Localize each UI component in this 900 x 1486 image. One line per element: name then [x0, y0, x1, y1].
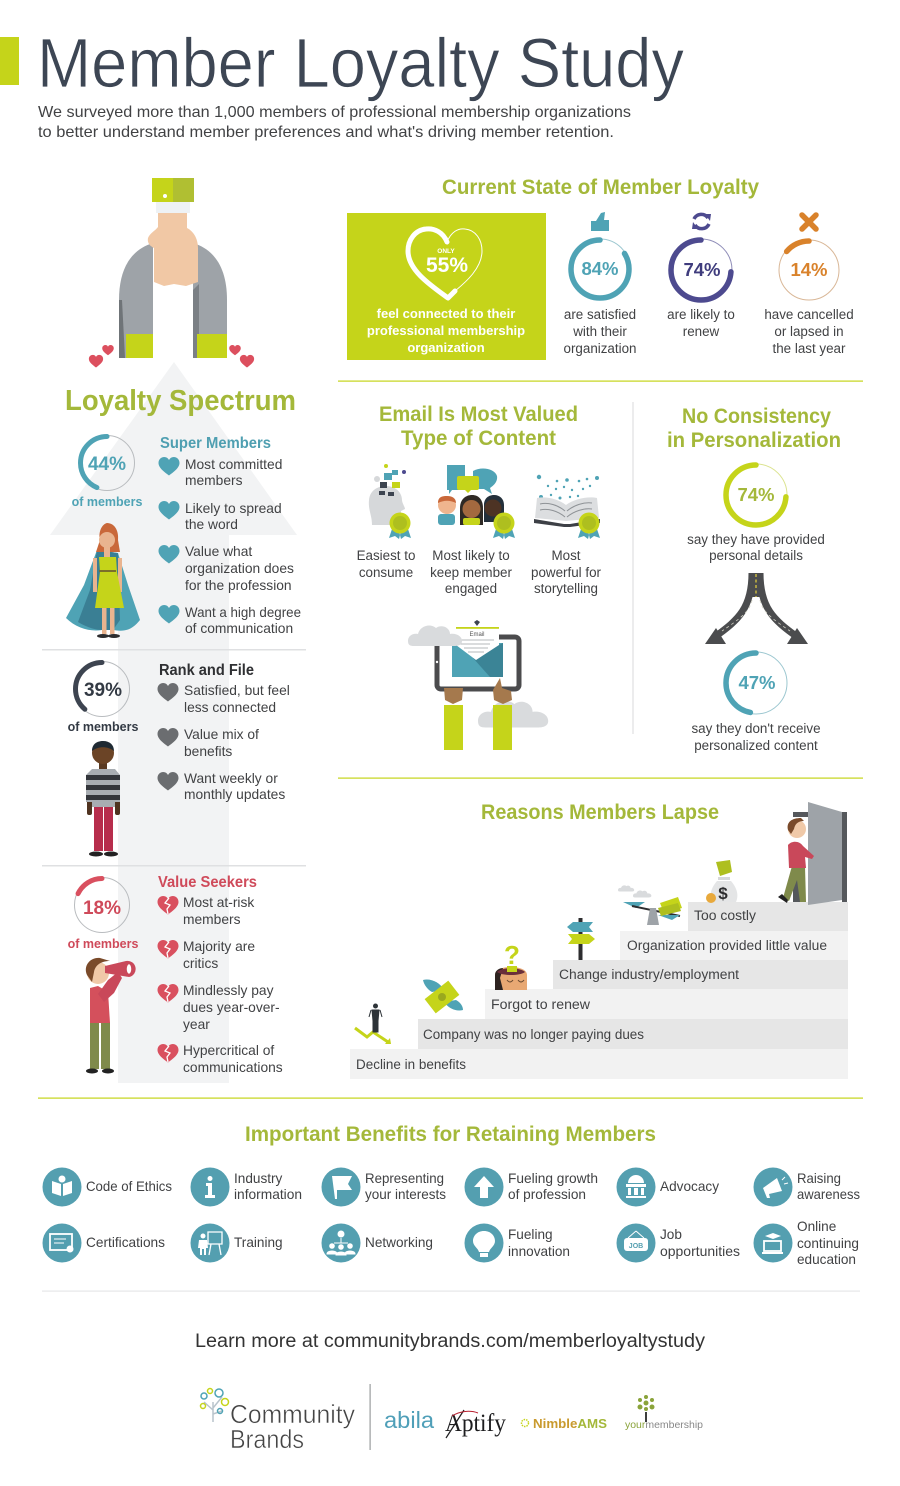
step 2: Company was no longer paying dues: [423, 1027, 644, 1042]
heading: current state: Current State of Member Loyalty: [442, 176, 759, 199]
list with hearts: [158, 683, 290, 802]
caption: [531, 548, 602, 596]
caption: of members: [68, 720, 138, 734]
benefit: industry information: [190, 1168, 302, 1206]
stat: 84% satisfied: 84%: [581, 258, 619, 279]
heading: personalization: No Consistency: [682, 405, 831, 428]
caption: of members: [68, 937, 138, 951]
list with hearts: for the profession: [185, 578, 292, 593]
stat: 47% no personalized content: [691, 652, 821, 753]
list with hearts: the word: [185, 517, 238, 532]
step 3: Forgot to renew: [491, 997, 590, 1012]
heading: Member Loyalty Study: [37, 24, 684, 102]
icon: signpost: [567, 918, 595, 960]
step 3: [485, 989, 848, 1019]
benefit: job opportunities: opportunities: [660, 1244, 740, 1259]
caption: feel connected to their: [377, 306, 515, 321]
icon: thumbs up: [591, 212, 609, 231]
benefit: raising awareness: [754, 1168, 860, 1206]
benefit: training: [190, 1224, 283, 1262]
magnet: [119, 243, 153, 358]
caption: are satisfied: [564, 307, 636, 322]
man: [778, 818, 814, 903]
illustration: man leaving through door: [778, 802, 847, 905]
icon: money bag: [706, 860, 737, 903]
benefit: raising awareness: awareness: [797, 1187, 860, 1202]
benefit: fueling innovation: innovation: [508, 1244, 570, 1259]
ring: [670, 239, 732, 301]
title: [0, 24, 684, 102]
caption: are likely to: [667, 307, 735, 322]
list with broken hearts: Majority are: [183, 939, 255, 954]
benefit: code of ethics: [42, 1168, 172, 1206]
benefit: fueling growth: Fueling growth: [508, 1171, 598, 1186]
stat: 74% provided details: personal details: [709, 548, 803, 563]
hand: [148, 213, 198, 286]
illustration: hand holding magnet: [89, 178, 254, 367]
stat: 84% satisfied: organization: [564, 341, 636, 356]
panel: 55% feel connected: organization: [407, 340, 485, 355]
step 4: [553, 960, 848, 989]
stat: 74% provided details: say they have provided: [687, 532, 825, 547]
caption: Most likely to: [432, 548, 510, 563]
list with hearts: Want weekly or: [184, 771, 278, 786]
list with broken hearts: Hypercritical of: [183, 1043, 274, 1058]
benefit: job opportunities: JOB: [629, 1243, 643, 1250]
heading: email: [379, 403, 578, 450]
stat: 84% satisfied: [564, 212, 636, 356]
icon: money bag: $: [718, 884, 728, 903]
sleeves: [444, 705, 463, 750]
stat: 74% provided details: [687, 464, 825, 563]
illustration: email on tablet: Email: [469, 632, 485, 638]
panel: benefits grid: [42, 1168, 860, 1267]
step 6: [688, 902, 848, 931]
list with hearts: Want a high degree: [185, 605, 301, 620]
subheading: Super Members: [160, 435, 271, 452]
caption: [357, 548, 415, 580]
ring 39%: 39%: [84, 680, 122, 701]
call to action: Learn more at communitybrands.com/memberloyaltystudy: [195, 1331, 706, 1352]
benefit: representing your interests: your interests: [365, 1187, 446, 1202]
list with hearts: Likely to spread: [185, 501, 282, 516]
icon: head with content: [369, 464, 411, 539]
benefit: industry information: Industry: [234, 1171, 283, 1186]
benefit: online continuing education: Online: [797, 1219, 836, 1234]
stat: 74% likely to renew: [667, 214, 735, 339]
ring: [779, 240, 839, 300]
step 5: Organization provided little value: [627, 938, 827, 953]
list with hearts: benefits: [184, 744, 232, 759]
ring 18%: 18%: [83, 898, 121, 919]
heading: important benefits: Important Benefits for Retaining Members: [245, 1123, 656, 1146]
icon: scale with clouds and money: [618, 885, 682, 925]
stat: 74% likely to renew: 74%: [683, 259, 721, 280]
door frame: [842, 812, 847, 902]
ring 18%: [74, 878, 130, 932]
logo: aptify: Aptify: [445, 1410, 506, 1437]
tablet: [437, 637, 519, 689]
benefit: certifications: Certifications: [86, 1235, 165, 1250]
heading: personalization: in Personalization: [667, 429, 841, 452]
list with hearts: of communication: [185, 621, 293, 636]
ring 44%: [80, 436, 134, 490]
step 1: [350, 1049, 848, 1079]
logo: abila: abila: [384, 1407, 434, 1433]
illustration: email on tablet: [408, 620, 548, 750]
list with hearts: Value mix of: [184, 727, 259, 742]
magnet tips: [126, 334, 153, 358]
icon: man on falling graph: [355, 1004, 391, 1044]
icon: man in striped shirt: [86, 741, 120, 856]
question mark: ?: [504, 940, 520, 970]
icon: three people with speech bubbles: [438, 465, 515, 539]
ring 44%: 44%: [88, 454, 126, 475]
intro text: We surveyed more than 1,000 members of professional membership organizations: [38, 104, 631, 121]
panel: 55% feel connected: ONLY: [437, 248, 455, 255]
panel: 55% feel connected: [347, 213, 546, 360]
panel: 55% feel connected: professional membership: [367, 323, 525, 338]
ring 39%: [74, 662, 130, 716]
stat: 47% no personalized content: personalized content: [694, 738, 818, 753]
icon: open book with particles: [534, 475, 600, 539]
stat: 47% no personalized content: 47%: [738, 672, 776, 693]
caption: of members: [72, 495, 142, 509]
list with hearts: Satisfied, but feel: [184, 683, 290, 698]
stat: 84% satisfied: with their: [572, 324, 627, 339]
step 5: [620, 931, 848, 960]
benefit: fueling growth: [464, 1168, 598, 1206]
logo: community brands: [200, 1388, 355, 1454]
benefit: online continuing education: continuing: [797, 1236, 859, 1251]
icon: x mark: [802, 215, 816, 229]
chart: staircase of reasons: [350, 902, 848, 1079]
caption: Easiest to: [357, 548, 415, 563]
benefit: fueling innovation: Fueling: [508, 1227, 553, 1242]
logo: yourmembership: [625, 1395, 703, 1431]
list with hearts: monthly updates: [184, 787, 285, 802]
icon: heart gauge: [408, 229, 455, 298]
benefit: representing your interests: Representing: [365, 1171, 444, 1186]
step 6: Too costly: [694, 908, 756, 923]
list with hearts: organization does: [185, 561, 294, 576]
list with hearts: Most committed: [185, 457, 282, 472]
list with hearts: less connected: [184, 700, 276, 715]
icon: woman with cape: [66, 523, 140, 638]
benefit: fueling innovation: [464, 1224, 570, 1262]
benefit: fueling growth: of profession: [508, 1187, 586, 1202]
ring: [570, 239, 630, 299]
stat: 74% likely to renew: renew: [683, 324, 720, 339]
caption: storytelling: [534, 581, 598, 596]
stat: 14% cancelled: the last year: [773, 341, 846, 356]
stat: 14% cancelled: or lapsed in: [774, 324, 844, 339]
stat: 14% cancelled: [764, 215, 854, 356]
icon: flying money: [423, 979, 463, 1013]
subheading: Value Seekers: [158, 874, 257, 891]
icon: renew arrows: [694, 214, 709, 229]
intro text: to better understand member preferences and what's driving member retention.: [38, 124, 614, 141]
list with hearts: Value what: [185, 544, 252, 559]
panel: rank and file: [68, 662, 290, 856]
logo: community brands: Community: [230, 1399, 355, 1429]
step 2: [418, 1019, 848, 1049]
panel: value seekers: [68, 874, 283, 1075]
caption: [430, 548, 512, 596]
benefit: certifications: [42, 1224, 165, 1262]
list with hearts: [158, 457, 301, 636]
caption: engaged: [445, 581, 497, 596]
benefit: advocacy: [616, 1168, 719, 1206]
intro text: [38, 104, 631, 141]
caption: consume: [359, 565, 413, 580]
heading: loyalty spectrum: Loyalty Spectrum: [65, 385, 296, 417]
door: [808, 802, 842, 905]
list with broken hearts: Most at-risk: [183, 895, 254, 910]
stat: 14% cancelled: 14%: [790, 259, 828, 280]
logo: yourmembership: yourmembership: [625, 1420, 703, 1431]
list with broken hearts: critics: [183, 956, 218, 971]
stat: 74% provided details: 74%: [737, 484, 775, 505]
stat: 47% no personalized content: say they don't receive: [691, 721, 821, 736]
clouds: [408, 626, 462, 646]
benefit: raising awareness: Raising: [797, 1171, 841, 1186]
shirt cuff: [152, 178, 173, 202]
benefit: industry information: information: [234, 1187, 302, 1202]
letter: [456, 627, 499, 660]
accent bar: [0, 37, 19, 85]
caption: powerful for: [531, 565, 602, 580]
heading: email: Type of Content: [401, 427, 556, 450]
logo: nimble ams: NimbleAMS: [533, 1416, 607, 1431]
benefit: networking: Networking: [365, 1235, 433, 1250]
list with broken hearts: members: [183, 912, 241, 927]
benefit: job opportunities: [616, 1224, 740, 1262]
icon: man with binoculars: [86, 958, 136, 1074]
panel: 55% feel connected: 55%: [426, 254, 468, 277]
heading: email: Email Is Most Valued: [379, 403, 578, 426]
benefit: representing your interests: [322, 1168, 446, 1206]
list with broken hearts: [158, 895, 283, 1075]
hands: [444, 688, 463, 704]
caption: Most: [551, 548, 581, 563]
list with broken hearts: dues year-over-: [183, 1000, 280, 1015]
benefit: advocacy: Advocacy: [660, 1179, 719, 1194]
list with broken hearts: year: [183, 1017, 210, 1032]
heading: personalization: [667, 405, 841, 452]
list with broken hearts: Mindlessly pay: [183, 983, 274, 998]
red hearts: [89, 345, 254, 367]
icon: forgetful head: [495, 940, 527, 990]
background arrow: loyalty spectrum: [50, 362, 297, 1083]
heading: reasons members lapse: Reasons Members Lapse: [481, 801, 719, 824]
benefit: code of ethics: Code of Ethics: [86, 1179, 172, 1194]
step 4: Change industry/employment: [559, 967, 739, 982]
list with broken hearts: communications: [183, 1060, 283, 1075]
subheading: Rank and File: [159, 662, 254, 679]
benefit: training: Training: [234, 1235, 283, 1250]
step 1: Decline in benefits: [356, 1057, 466, 1072]
list with hearts: members: [185, 473, 243, 488]
benefit: online continuing education: [754, 1219, 859, 1267]
caption: keep member: [430, 565, 512, 580]
benefit: job opportunities: Job: [660, 1227, 682, 1242]
caption: have cancelled: [764, 307, 854, 322]
logo: community brands: Brands: [230, 1424, 304, 1454]
panel: super members: [66, 435, 301, 638]
icon: road splitting into two arrows: [705, 573, 808, 644]
benefit: networking: [322, 1224, 433, 1262]
envelope: [452, 643, 503, 677]
benefit: online continuing education: education: [797, 1252, 856, 1267]
